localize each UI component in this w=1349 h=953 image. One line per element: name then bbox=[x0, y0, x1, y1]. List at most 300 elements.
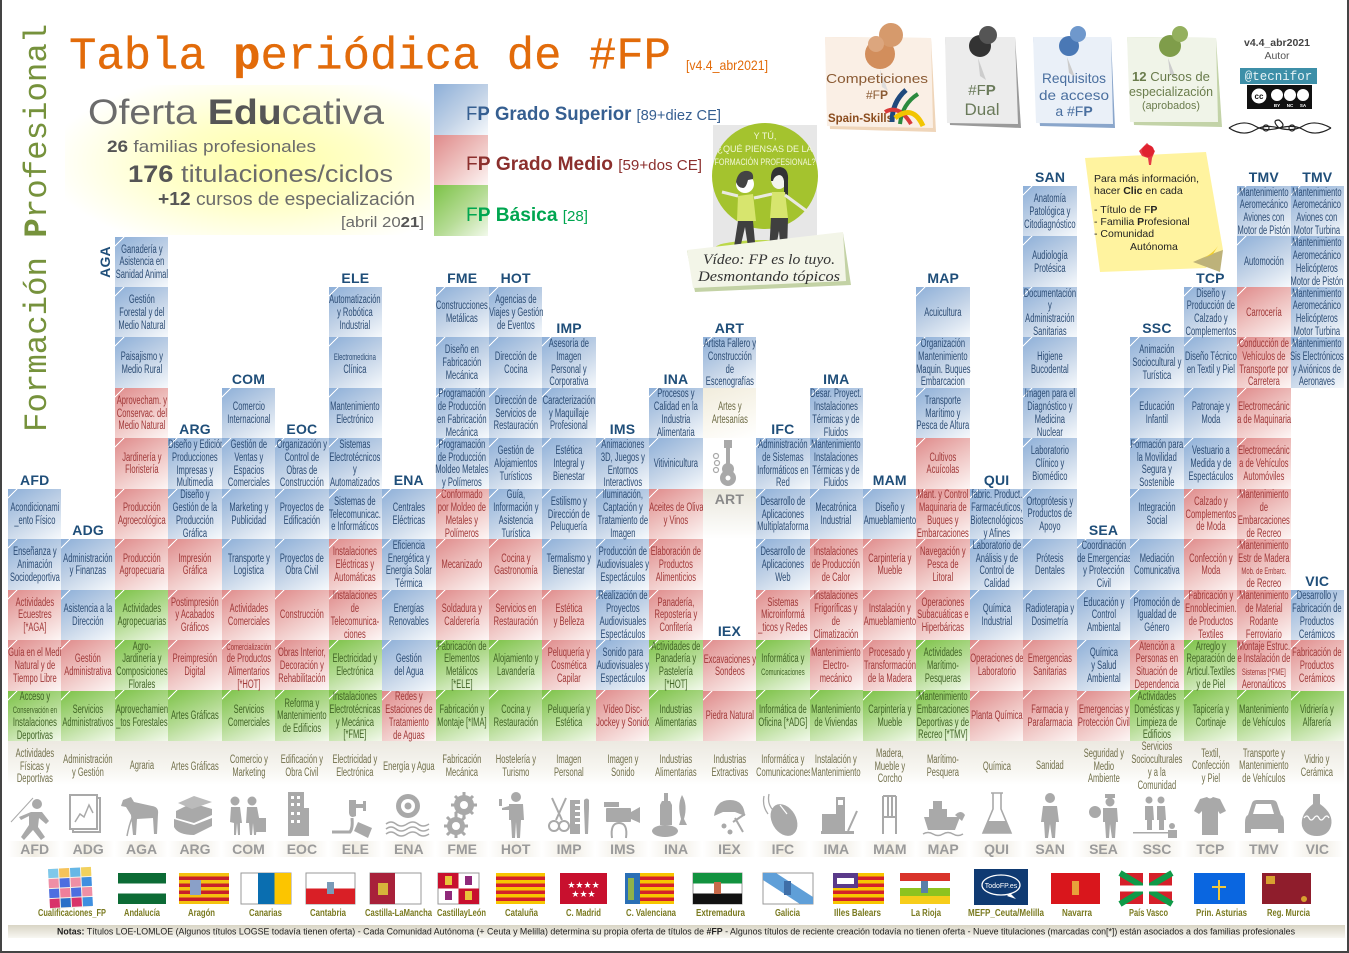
cell: Mantenimiento de Embarcaciones bbox=[1237, 489, 1291, 539]
column SSC bbox=[1130, 320, 1184, 792]
cell: Mantenimiento de Embarcaciones: de bbox=[1260, 502, 1268, 514]
flag: La Rioja bbox=[900, 873, 950, 904]
cell: Atención a Personas: Situación de bbox=[1136, 666, 1178, 678]
cell: Mantenimiento Instalaciones: Fluidos bbox=[824, 477, 848, 489]
cell: Gestión de Alojamientos: Gestión de bbox=[497, 445, 534, 457]
cell: Construcción bbox=[275, 590, 329, 640]
note: competiciones: Spain-Skills bbox=[828, 111, 893, 125]
cell: Producción Agroecológica: Producción bbox=[123, 502, 160, 514]
cell: Preimpresión Digital: Preimpresión bbox=[173, 653, 217, 665]
flag: Murcia bbox=[1262, 873, 1311, 904]
cell: Promoción de Igualdad: Género bbox=[1144, 622, 1170, 634]
cell: Instalaciones Frigoríficas: Frigoríficas y bbox=[815, 603, 858, 615]
flag: Navarra bbox=[1051, 873, 1100, 904]
cell: Mantenimiento Estr de Madera: Mantenimiento bbox=[1239, 540, 1289, 552]
cell: Administración de Sistemas bbox=[756, 438, 810, 489]
cell: Aceites de Oliva: Aceites de Oliva bbox=[649, 502, 704, 514]
cell: Sis Electrónicos: Mantenimiento bbox=[1293, 338, 1342, 350]
flag: Aragón bbox=[179, 873, 229, 904]
cell: Desar. Proyect.: Térmicas y de bbox=[813, 414, 860, 426]
sticky note: más información: - Familia Profesional bbox=[1094, 216, 1190, 228]
cell: Comercio y Marketing bbox=[222, 741, 275, 793]
cell: Gestión Administrativa: Gestión bbox=[75, 653, 101, 665]
family label ART: ART bbox=[715, 320, 744, 336]
cell: Cocina y Gastronomía bbox=[489, 539, 542, 590]
cell: Vidriería y Alfarería: Vidriería y bbox=[1300, 704, 1334, 716]
cell: Gestión de Ventas: Ventas y bbox=[234, 452, 263, 464]
cell: Diseño en Fabricación bbox=[436, 337, 489, 388]
cell: Elaboración de Productos bbox=[649, 539, 703, 590]
cell: Prótesis Dentales: Prótesis bbox=[1036, 553, 1064, 565]
note: FP dual: #FP bbox=[968, 82, 996, 99]
cell: Planta Química: Planta Química bbox=[971, 710, 1022, 722]
cell: Material Rodante bbox=[1237, 590, 1291, 640]
cell: Farmacia: Parafarmacia bbox=[1028, 717, 1072, 729]
cell: Diseño en Fabricación: Mecánica bbox=[446, 370, 478, 382]
cell: Madera, Mueble y Corcho: Madera, bbox=[876, 748, 904, 760]
cell: Actividades Domésticas: Limpieza de bbox=[1137, 717, 1177, 729]
cell: Artes Gráficas bbox=[168, 690, 222, 741]
cell: Animación Sociocultural: Turística bbox=[1143, 370, 1171, 382]
oferta educativa text: [abril 20 21] bbox=[341, 214, 424, 231]
cell: Actividades Marítimo-Pesqueras: Actividades bbox=[924, 647, 962, 659]
cell: Mantenimiento Embarcaciones: Recreo [*TMV] bbox=[918, 729, 968, 741]
cell: Animación Sociocultural: Animación bbox=[1139, 344, 1175, 356]
cell: Construcciones Metálicas: Metálicas bbox=[446, 313, 478, 325]
cell: Acondicionamiento Físico: _ento Físico bbox=[14, 515, 55, 527]
cell: Administración y Gestión bbox=[61, 741, 115, 793]
cell: Emergencias Sanitarias bbox=[1023, 640, 1077, 690]
video panel: Vídeo: FP es lo tuyo. bbox=[703, 252, 835, 268]
cell: Montaje Estruc.: Montaje Estruc. bbox=[1238, 641, 1290, 653]
cell: Fabric. Product.: Farmacéuticos, bbox=[971, 502, 1022, 514]
cell: Electricidad y Electrónica family bbox=[329, 741, 382, 793]
cell: Sistemas Electrotécnicos: Sistemas bbox=[340, 439, 371, 451]
cell: Ortoprótesis bbox=[1023, 489, 1077, 539]
cell: Helicópteros Turbina bbox=[1291, 287, 1344, 337]
cell: Instalaciones de Telecomunicaciones: Instalaciones bbox=[333, 590, 377, 602]
cell: Artes Gráficas family bbox=[168, 741, 222, 793]
cell: Administración y Finanzas bbox=[61, 539, 115, 590]
sticky note: más información bbox=[1085, 143, 1223, 272]
cell: Guía Medio Natural: Guía en el Medio bbox=[8, 647, 65, 659]
flag: Canarias bbox=[241, 873, 291, 904]
family labels under icons: ADG bbox=[73, 841, 104, 857]
cell: Vestuario a Medida: Vestuario a bbox=[1192, 445, 1229, 457]
cell: Realización de Proyectos: Espectáculos bbox=[600, 629, 645, 641]
cell: Programación Moldeo: Moldeo Metales bbox=[436, 464, 489, 476]
cell: Carrocería bbox=[1237, 287, 1291, 337]
cell: Integración Social bbox=[1130, 489, 1184, 539]
flag: C. Madrid: ★★★★ bbox=[567, 880, 600, 890]
flag: C. Madrid bbox=[560, 873, 607, 904]
family labels under icons: INA bbox=[664, 841, 688, 857]
cell: Montaje Estruc.: e Instalación de bbox=[1237, 653, 1290, 665]
cell: Postimpresión: Gráficos bbox=[181, 622, 209, 634]
cell: Actividades Domésticas bbox=[1130, 690, 1184, 741]
column COM bbox=[222, 371, 275, 779]
cell: Coordinación de Emergencias bbox=[1077, 539, 1130, 590]
cell: Vestuario a Medida: Medida y de bbox=[1190, 458, 1231, 470]
icon ENA bbox=[386, 794, 429, 836]
cell: Instalaciones de Producción de Calor bbox=[810, 539, 863, 590]
cell: Carpintería y Mueble superior bbox=[863, 539, 916, 590]
cell: Actividades de Panadería: Panadería y bbox=[656, 653, 696, 665]
family label IMA: IMA bbox=[823, 371, 849, 387]
cell: Carrocería: Carrocería bbox=[1246, 307, 1282, 319]
cell: Procesos y Calidad: Alimentaria bbox=[657, 427, 695, 439]
flag: Cantabria bbox=[306, 873, 355, 904]
icon: Cualificaciones mosaic bbox=[48, 867, 93, 909]
cell: Calzado y Complementos: Complementos bbox=[1185, 508, 1236, 520]
cell: Fabric. Product.: y Afines bbox=[983, 528, 1010, 540]
cell: Administración y Gestión: y Gestión bbox=[72, 767, 104, 779]
cell: Patronaje y Moda: Moda bbox=[1201, 414, 1220, 426]
author block bbox=[1240, 37, 1317, 109]
cell: Instalaciones Electrotécnicas bbox=[329, 690, 382, 741]
cell: Química Industrial: Química bbox=[983, 603, 1011, 615]
family label EOC: EOC bbox=[286, 421, 317, 437]
flag labels: La Rioja bbox=[911, 908, 941, 919]
cell: Gestión Administrativa: Administrativa bbox=[65, 666, 112, 678]
cell: Gestión Administrativa bbox=[61, 640, 115, 690]
cell: Imagen y Sonido: Sonido bbox=[611, 767, 634, 779]
cell: Transporte y Mantenimiento: Transporte y bbox=[1243, 748, 1285, 760]
cell: Organización y Control: Obras de bbox=[286, 465, 317, 477]
cell: Transporte y Logística bbox=[222, 539, 275, 590]
cell: Mant. y Control: Buques y bbox=[927, 515, 959, 527]
cell: Calzado y Complementos: de Moda bbox=[1196, 521, 1225, 533]
cell: Realización de Proyectos: Audiovisuales bbox=[599, 616, 646, 628]
family labels under icons: FME bbox=[447, 841, 477, 857]
cell: Higiene Bucodental bbox=[1023, 337, 1077, 388]
cell: Instalaciones Electrotécnicas: y Mecánica bbox=[336, 717, 374, 729]
cell: Soldadura bbox=[436, 590, 489, 640]
cell: Comercialización: de Productos bbox=[226, 653, 271, 665]
cell: Ganadería: Sanidad Animal bbox=[115, 269, 168, 281]
vertical title: Formación Profesional bbox=[19, 24, 56, 432]
icon TMV bbox=[1245, 800, 1284, 833]
flag labels: C. Valenciana bbox=[626, 908, 676, 919]
cell: Seguridad y Medio Ambiente: Medio bbox=[1093, 761, 1114, 773]
icon IEX bbox=[714, 800, 745, 834]
cell: Reforma y Mantenimiento: Reforma y bbox=[285, 698, 319, 710]
cell: Sis Electrónicos: Aeronaves bbox=[1299, 376, 1335, 388]
cell: Actividades Físicas: Actividades bbox=[15, 748, 54, 760]
cell: Agraria bbox=[115, 741, 168, 793]
cell: Proyectos de Edificación bbox=[275, 489, 329, 539]
cell: Vestuario a Medida: Espectáculos bbox=[1188, 471, 1233, 483]
cell: Química: Química bbox=[983, 761, 1011, 773]
cell: Impresión Gráfica: Impresión bbox=[178, 553, 212, 565]
cell: Programación Moldeo: de Producción bbox=[438, 452, 486, 464]
cell: Cocina y Gastronomía: Gastronomía bbox=[494, 565, 537, 577]
cell: Fabricación y Montaje: Fabricación y bbox=[440, 704, 485, 716]
cell: Sistemas Electrotécnicos: Electrotécnicos bbox=[330, 452, 381, 464]
icon HOT bbox=[499, 792, 524, 838]
cell: Montaje Estruc.: Aeronaúticos bbox=[1242, 679, 1286, 691]
cell: Obras Interior: Decoración y bbox=[280, 660, 324, 672]
column TCP bbox=[1184, 270, 1237, 785]
cell: Asesoría de Imagen: Personal y bbox=[551, 364, 587, 376]
note: FP dual: Dual bbox=[965, 100, 999, 119]
note: cursos de especializacion bbox=[1127, 26, 1222, 127]
cell: Guía Medio Natural: Tiempo Libre bbox=[13, 673, 57, 685]
cell: Imagen para el Diagnóstico: Nuclear bbox=[1037, 427, 1063, 439]
cell: Imagen Personal: Personal bbox=[554, 767, 584, 779]
cell: Multiplataforma: Desarrollo de bbox=[760, 496, 805, 508]
cell: Animación Sociocultural bbox=[1130, 337, 1184, 388]
author block: v4.4_abr2021 bbox=[1244, 37, 1310, 49]
cell: Electromecánica de Maquinaria: a de Maquinaria bbox=[1237, 414, 1291, 426]
cell: Educación Infantil: Infantil bbox=[1146, 414, 1168, 426]
cell: Actividades Ecuestres bbox=[8, 590, 61, 640]
cell: Producción Agropecuaria: Agropecuaria bbox=[119, 565, 164, 577]
cell: Redes y Estaciones: Tratamiento bbox=[389, 717, 429, 729]
cell: Industrias Alimentarias family: Industrias bbox=[660, 754, 692, 766]
cell: Imagen Personal: Imagen bbox=[557, 754, 582, 766]
cell: Conformado: Metales y bbox=[446, 515, 478, 527]
cell: Diseño y Amueblamiento: Amueblamiento bbox=[864, 515, 916, 527]
cell: Organización Mantenimiento: Embarcacion bbox=[921, 376, 965, 388]
cell: Transporte y Mantenimiento: Mantenimiento bbox=[1239, 760, 1289, 772]
cell: Servicios Comerciales: Comerciales bbox=[228, 717, 269, 729]
cell: Vídeo Disc-Jockey: Jockey y Sonido bbox=[596, 717, 651, 729]
icon AGA bbox=[121, 797, 158, 836]
cell: Atención a Personas: Atención a bbox=[1139, 641, 1175, 653]
cell: Calzado y Complementos: Calzado y bbox=[1194, 496, 1227, 508]
cell: Sistemas Microinformáticos: Sistemas bbox=[767, 597, 798, 609]
cell: Prótesis Dentales: Dentales bbox=[1035, 565, 1065, 577]
cell: Fabricación de Elementos: Fabricación de bbox=[438, 641, 487, 653]
cell: Enseñanza y Animación bbox=[8, 539, 61, 590]
cell: Instalación y Mantenimiento bbox=[810, 741, 863, 793]
cell: Comercio Internacional: Internacional bbox=[227, 414, 270, 426]
cell: Aprovecham.: Aprovecham. y bbox=[116, 395, 167, 407]
cell: Caracterización bbox=[542, 388, 596, 438]
cell: Automatización: Industrial bbox=[340, 320, 371, 332]
cell: Química y Salud Ambiental: y Salud bbox=[1091, 660, 1116, 672]
cell: Artista Fallero: Escenografías bbox=[705, 376, 754, 388]
cell: Reforma y Mantenimiento: Mantenimiento bbox=[277, 710, 327, 722]
cell: Comercialización: [*HOT] bbox=[237, 679, 260, 691]
cell: Radioterapia bbox=[1023, 590, 1077, 640]
cell: Industrias Alimentarias: Alimentarias bbox=[655, 717, 697, 729]
cell: Mant. y Control bbox=[916, 489, 970, 539]
cell: Fabricación de Productos Cerámicos bbox=[1291, 640, 1344, 691]
cell: Proyectos de Obra Civil: Proyectos de bbox=[280, 553, 324, 565]
cell: Montaje Estruc. bbox=[1237, 640, 1291, 690]
flag: Extremadura bbox=[693, 873, 742, 904]
family label IEX: IEX bbox=[718, 623, 741, 639]
flag: Illes Balears bbox=[833, 873, 884, 904]
column ADG bbox=[61, 522, 115, 779]
cell: Arreglo y Reparación bbox=[1184, 640, 1237, 690]
cell: Dirección de Servicios: Restauración bbox=[493, 420, 538, 432]
cell: Termalismo: Termalismo y bbox=[547, 553, 591, 565]
cell: Elaboración de Productos: Alimenticios bbox=[656, 572, 696, 584]
cell: Gestión de Alojamientos bbox=[489, 438, 542, 489]
cell: Mantenimiento Embarcaciones: Deportivas y de bbox=[917, 717, 969, 729]
cell: Jardinería bbox=[115, 438, 168, 489]
cell: Formación para la Movilidad: Formación para bbox=[1131, 439, 1183, 451]
cell: Conformado: por Moldeo de bbox=[438, 502, 486, 514]
cell: Química Industrial bbox=[970, 590, 1023, 640]
cell: Mant. y Control: Maquinaria de bbox=[919, 502, 967, 514]
note: FP dual bbox=[945, 26, 1021, 128]
cell: Transporte y Logística: Transporte y bbox=[227, 553, 269, 565]
column MAM bbox=[863, 472, 916, 785]
cell: Vidrio y Cerámica: Cerámica bbox=[1301, 767, 1333, 779]
cell: Audiología bbox=[1023, 236, 1077, 287]
cell: Acuicultura bbox=[916, 287, 970, 337]
icon IMP bbox=[549, 798, 589, 834]
cell: Helicópteros Pistón: Mantenimiento bbox=[1293, 237, 1342, 249]
cell: Sanidad bbox=[1023, 741, 1077, 793]
icon VIC bbox=[1302, 794, 1332, 836]
cell: Desar. Proyect.: Desar. Proyect. bbox=[811, 388, 862, 400]
cell: Producción de Audiovisuales: Producción de bbox=[598, 546, 647, 558]
cell: Administración y Finanzas: y Finanzas bbox=[70, 565, 106, 577]
cell: Conformado: Polímeros bbox=[445, 528, 479, 540]
cell: Patronaje y Moda bbox=[1184, 388, 1237, 438]
cell: Procesos y Calidad: Procesos y bbox=[657, 388, 695, 400]
cell: Laboratorio de Análisis: Análisis y de bbox=[975, 553, 1018, 565]
cell: Arreglo y Reparación: y de Piel bbox=[1196, 679, 1225, 691]
family label SEA: SEA bbox=[1089, 522, 1118, 538]
family labels under icons: EOC bbox=[287, 841, 317, 857]
cell: Animaciones 3D: Animaciones bbox=[601, 439, 644, 451]
column SAN bbox=[1023, 169, 1077, 776]
cell: Dirección de Cocina bbox=[489, 337, 542, 388]
cell: Diseño y Gestión: Gestión de la bbox=[173, 502, 217, 514]
family labels under icons: VIC bbox=[1306, 841, 1329, 857]
cell: Mantenimiento de Embarcaciones: Embarcaciones bbox=[1238, 515, 1290, 527]
icon SSC bbox=[1133, 796, 1177, 838]
cell: Gestión de Ventas: Gestión de bbox=[230, 439, 267, 451]
cell: Transporte Marítimo: Transporte bbox=[925, 395, 961, 407]
cell: Instalación y Amueblamiento: Amueblamiento bbox=[864, 616, 916, 628]
cell: Realización de Proyectos: Realización de bbox=[598, 590, 647, 602]
cell: Desar. Proyect. bbox=[810, 388, 863, 438]
cell: Servicios Comerciales: Servicios bbox=[233, 704, 264, 716]
cell: Marítimo-Pesquera bbox=[916, 741, 970, 793]
cell: Educación y Control Ambiental: Ambiental bbox=[1087, 622, 1120, 634]
cell: Jardinería: Jardinería y bbox=[122, 452, 161, 464]
flag: Galicia bbox=[763, 873, 813, 904]
cell: Sistemas de Telecomunicac.: e Informáticos bbox=[332, 521, 379, 533]
icon IMA bbox=[821, 797, 857, 834]
cell: Marítimo-Pesquera: Pesquera bbox=[927, 767, 959, 779]
cell: Planta Química bbox=[970, 690, 1023, 741]
cell: Guía, Información: Asistencia bbox=[498, 515, 533, 527]
legend: grado medio: FP Grado Medio [59+dos CE] bbox=[466, 154, 702, 175]
cell: Laboratorio de Análisis: Calidad bbox=[984, 578, 1009, 590]
cell: Textil, Confección y Piel: Confección bbox=[1192, 760, 1229, 772]
flag labels: Cataluña bbox=[505, 908, 538, 919]
cell: Diseño en Fabricación: Fabricación bbox=[443, 357, 482, 369]
cell: Cocina y Restauración bbox=[489, 690, 542, 741]
cell: Sis Electrónicos bbox=[1291, 337, 1344, 388]
cell: Aprovechamientos Forestales: Aprovechamien bbox=[115, 704, 168, 716]
cell: Laboratorio Clínico: Biomédico bbox=[1032, 471, 1068, 483]
cell: Aprovechamientos Forestales bbox=[115, 690, 168, 741]
cell: Conducción de Vehículos: Carretera bbox=[1248, 376, 1280, 388]
cell: Aviones Motor Turbina bbox=[1291, 186, 1344, 236]
flag labels: Andalucía bbox=[124, 908, 160, 919]
cell: Eficiencia Energética bbox=[382, 539, 436, 590]
cell: Actividades Físicas bbox=[8, 741, 61, 793]
flag: C. Madrid: ★★★ bbox=[571, 889, 596, 899]
cell: Informática y Comunicaciones family: Informática y bbox=[761, 754, 804, 766]
cell: Diseño y Edición: Multimedia bbox=[177, 477, 213, 489]
cell: Peluquería y Cosmética bbox=[542, 640, 596, 690]
cell: Aviones Motor Turbina: Motor Turbina bbox=[1294, 225, 1340, 237]
cell: Aprovecham.: Medio Natural bbox=[118, 420, 165, 432]
cell: Servicios Socioculturales: Servicios bbox=[1142, 741, 1172, 753]
flag: Cataluña bbox=[496, 873, 545, 904]
flag labels: Cualificaciones_FP bbox=[38, 908, 106, 919]
cell: Actividades Comerciales: Actividades bbox=[229, 603, 268, 615]
cell: Desarrollo y Fabricación: Cerámicos bbox=[1299, 629, 1335, 641]
cell: Educación y Control Ambiental: Control bbox=[1091, 609, 1116, 621]
legend: grado superior bbox=[434, 84, 721, 135]
cell: Artes y Artesanías bbox=[703, 388, 756, 438]
version tag: [v4.4_abr2021] bbox=[686, 57, 768, 73]
column IMS bbox=[596, 421, 651, 779]
cell: Organización y Control: Control de bbox=[285, 452, 319, 464]
cell: Actividades Ecuestres: [*AGA] bbox=[23, 622, 46, 634]
cell: Promoción de Igualdad bbox=[1130, 590, 1184, 640]
cell: Formación para la Movilidad: la Movilidad bbox=[1137, 452, 1177, 464]
cell: Paisajismo: Medio Rural bbox=[121, 364, 162, 376]
cell: Informática y Comunicaciones: Comunicaciones bbox=[761, 667, 805, 677]
cell: Fabricación de Productos Cerámicos: Cerámicos bbox=[1299, 673, 1335, 685]
column IMP bbox=[542, 320, 596, 779]
cell: Gestión de Ventas: Espacios bbox=[233, 464, 264, 476]
cell: Animaciones 3D bbox=[596, 438, 649, 489]
author block: Autor bbox=[1264, 50, 1290, 62]
cell: Instalaciones de Producción de Calor: Instalaciones bbox=[814, 546, 858, 558]
cell: Guía, Información: Turística bbox=[501, 528, 530, 540]
cell: Gestión Forestal bbox=[115, 287, 168, 337]
flag: País Vasco bbox=[1120, 873, 1172, 904]
cell: Comercio y Marketing: Comercio y bbox=[229, 754, 268, 766]
cell: Confección y Moda bbox=[1184, 539, 1237, 590]
cell: Gestión Forestal: Medio Natural bbox=[118, 320, 165, 332]
cell: Sis Electrónicos: Sis Electrónicos bbox=[1290, 351, 1344, 363]
cell: Integración Social: Social bbox=[1147, 515, 1167, 527]
cell: Iluminación: Imagen bbox=[610, 528, 635, 540]
cell: Mantenimiento de Vehículos: Mantenimiento bbox=[1239, 704, 1289, 716]
cell: Actividades Marítimo-Pesqueras: Marítimo- bbox=[927, 660, 959, 672]
cell: Automatización bbox=[329, 287, 382, 337]
cell: Construcción: Construcción bbox=[280, 609, 324, 621]
cell: Calzado y Complementos bbox=[1184, 489, 1237, 539]
cell: Sonido para Audiovisuales: Sonido para bbox=[602, 647, 643, 659]
cell: Ganadería: Ganadería y bbox=[121, 244, 162, 256]
cell: Organización Mantenimiento bbox=[916, 337, 970, 388]
cell: Mantenimiento de Viviendas bbox=[810, 690, 863, 741]
cell: Agro-Jardinería: Jardinería y bbox=[122, 653, 161, 665]
cell: Coordinación de Emergencias: Coordinación bbox=[1081, 540, 1126, 552]
cell: Estética y Belleza: y Belleza bbox=[554, 616, 584, 628]
column HOT bbox=[489, 270, 543, 779]
cell: Navegación y Pesca: Litoral bbox=[933, 572, 953, 584]
cell: Obras Interior bbox=[275, 640, 329, 690]
cell: Diseño y Producción de Calzado: Complementos bbox=[1185, 326, 1236, 338]
flag labels: Reg. Murcia bbox=[1267, 908, 1310, 919]
